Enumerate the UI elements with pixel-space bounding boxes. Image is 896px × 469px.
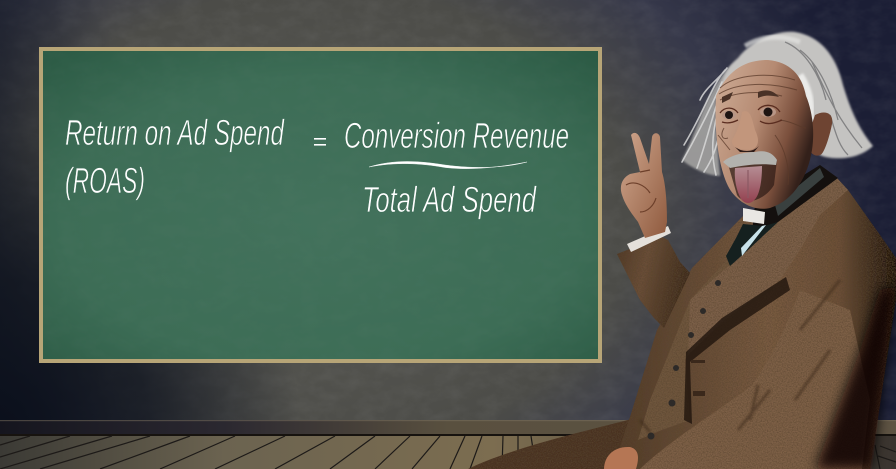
Einstein figure [468, 32, 896, 469]
mouth shadow [728, 160, 777, 201]
trousers and seated leg [468, 417, 700, 469]
moustache [723, 151, 777, 168]
raised sleeve [617, 232, 690, 328]
wispy left hair [682, 68, 727, 175]
shirt cuff [627, 226, 671, 252]
jacket lapel [688, 176, 848, 355]
hand making V sign [621, 133, 667, 238]
equals sign [314, 138, 326, 146]
forearm [640, 290, 870, 469]
left hair mass [682, 62, 735, 176]
eyes [720, 105, 782, 124]
wooden floor [0, 436, 896, 469]
ear [809, 112, 832, 156]
label: return on ad spend: Return on Ad Spend [65, 112, 285, 153]
forehead wrinkles [718, 75, 806, 185]
denominator: Total Ad Spend [362, 179, 537, 220]
tongue [735, 166, 762, 203]
hair [682, 32, 873, 176]
nose [732, 111, 758, 150]
tie [726, 222, 778, 266]
shirt front [741, 225, 766, 256]
buttons [648, 280, 721, 440]
fraction line [369, 162, 527, 169]
baseboard [0, 420, 896, 436]
eyebrows [722, 90, 779, 103]
sleeve folds [640, 280, 840, 432]
shirt collar [743, 208, 765, 224]
face [716, 60, 813, 209]
label: ROAS: (ROAS) [65, 160, 145, 201]
top and right hair mass [718, 32, 873, 158]
formula [65, 112, 569, 220]
hair highlights and shading [785, 42, 862, 155]
right edge shadow [815, 285, 896, 469]
neck shadow [752, 165, 838, 232]
waistcoat [638, 230, 775, 440]
fist [604, 447, 638, 469]
chalkboard frame [39, 47, 602, 363]
clothing [468, 176, 896, 469]
jacket body [612, 176, 896, 469]
lapel shadow [684, 277, 790, 424]
chalkboard [43, 51, 598, 359]
numerator: Conversion Revenue [344, 115, 569, 156]
